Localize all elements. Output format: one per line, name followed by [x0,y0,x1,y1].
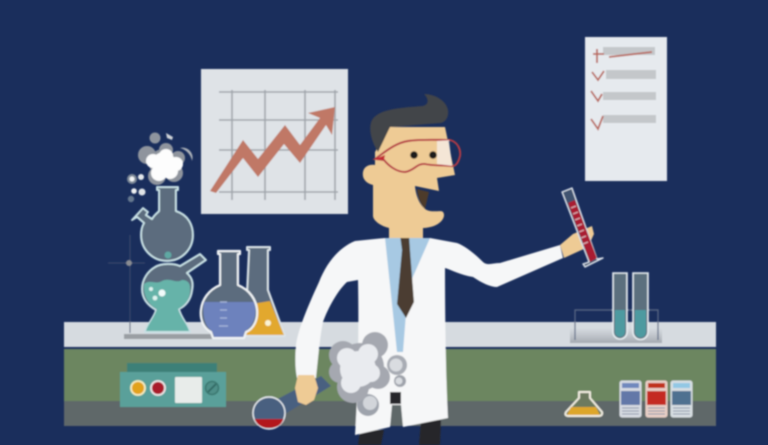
control box [120,363,226,407]
small yellow flask [565,392,602,416]
reagent bottles [620,381,692,417]
flask in left hand [253,376,331,429]
stand [108,235,145,333]
wall chart [201,69,348,214]
tie [397,235,414,318]
mouth [417,189,429,209]
eyes [410,151,418,159]
checklist [585,37,667,181]
smoke above flask [127,132,193,202]
erlenmeyer flask with yellow liquid [245,247,285,336]
distillation flask lower [142,254,206,332]
legs [358,420,441,445]
shirt [385,238,430,352]
round flask with blue liquid [201,251,257,338]
hair [370,94,448,152]
left hand [295,375,318,405]
right hand [560,226,594,258]
head [363,127,455,238]
distillation flask upper [132,187,193,261]
graduated cylinder [562,188,603,267]
scientist [253,94,603,445]
rising arrow [210,107,335,193]
goggles [375,140,460,172]
test tubes in rack [575,273,658,340]
smoke cloud at coat [329,332,407,416]
lab bench [64,322,716,426]
lab coat [295,238,563,435]
